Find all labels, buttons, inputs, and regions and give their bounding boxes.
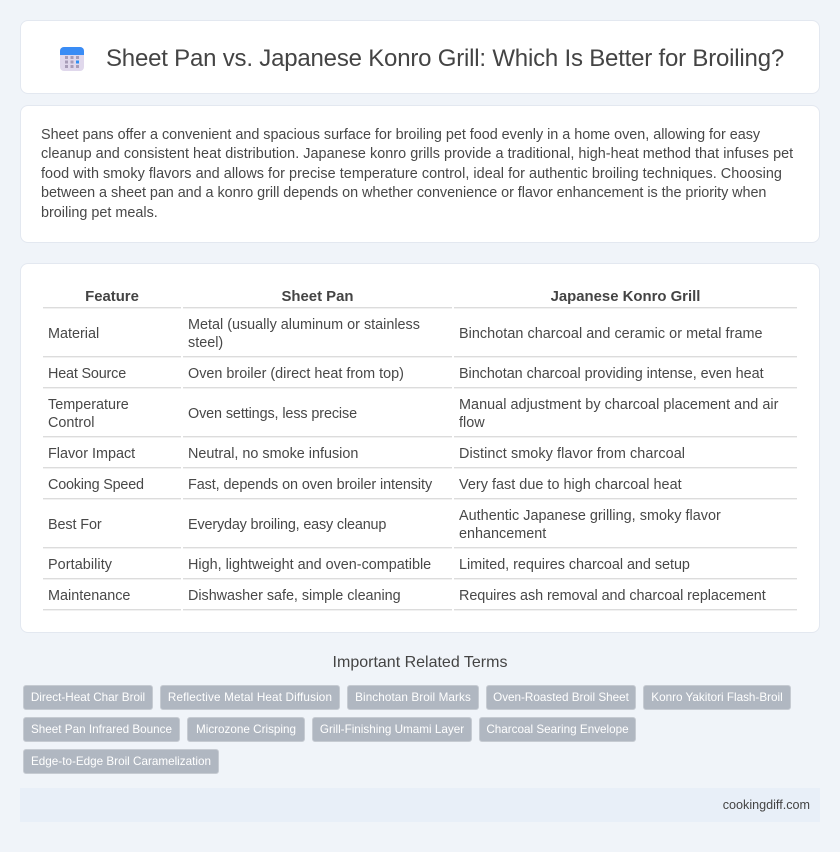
- tag list: related terms: Grill-Finishing Umami Layer: [320, 723, 464, 736]
- tag list: related terms: Microzone Crisping: [196, 723, 296, 736]
- tag list: related terms: Edge-to-Edge Broil Caramelization: [31, 755, 211, 768]
- text block: intro: cleanup and consistent heat distribution. Japanese konro grills provide a traditional, high-heat method that infuses pet: [41, 146, 793, 162]
- comparison table: Fast, depends on oven broiler intensity: [188, 477, 432, 493]
- tag list: related terms: Oven-Roasted Broil Sheet: [493, 691, 629, 704]
- comparison table: Flavor Impact: [48, 446, 135, 462]
- comparison table: Manual adjustment by charcoal placement and air: [459, 397, 778, 413]
- comparison table: Japanese Konro Grill: [551, 289, 700, 305]
- comparison table: enhancement: [459, 526, 546, 542]
- comparison table: Everyday broiling, easy cleanup: [188, 517, 386, 533]
- comparison table: Sheet Pan: [282, 289, 354, 305]
- comparison table: Cooking Speed: [48, 477, 144, 493]
- tag list: related terms: Reflective Metal Heat Diffusion: [168, 691, 332, 704]
- comparison table: Metal (usually aluminum or stainless: [188, 317, 420, 333]
- tag list: related terms: Binchotan Broil Marks: [355, 691, 471, 704]
- comparison table: Distinct smoky flavor from charcoal: [459, 446, 685, 462]
- comparison table: Maintenance: [48, 588, 130, 604]
- comparison table: Neutral, no smoke infusion: [188, 446, 358, 462]
- comparison table: Temperature: [48, 397, 129, 413]
- text block: intro: food with smoky flavors and allows for precise temperature control, ideal for authentic broiling techniques. Choosing: [41, 166, 782, 182]
- comparison table: Oven settings, less precise: [188, 406, 357, 422]
- comparison table: Control: [48, 415, 94, 431]
- text block: intro: [41, 127, 794, 221]
- comparison table: Authentic Japanese grilling, smoky flavor: [459, 508, 721, 524]
- comparison table: Requires ash removal and charcoal replacement: [459, 588, 766, 604]
- heading: related terms: Important Related Terms: [333, 654, 507, 671]
- comparison table: Material: [48, 326, 99, 342]
- comparison table: Dishwasher safe, simple cleaning: [188, 588, 401, 604]
- text block: intro: Sheet pans offer a convenient and spacious surface for broiling pet food evenly in a home oven, allowing for easy: [41, 127, 760, 143]
- icon: calendar: [60, 47, 84, 71]
- footer: source: cookingdiff.com: [723, 798, 810, 812]
- comparison table: Very fast due to high charcoal heat: [459, 477, 682, 493]
- footer: [20, 788, 820, 822]
- tag list: related terms: [23, 685, 791, 774]
- panel: comparison table: [20, 263, 820, 633]
- title: Sheet Pan vs. Japanese Konro Grill: Which Is Better for Broiling?: [106, 45, 784, 72]
- comparison table: Limited, requires charcoal and setup: [459, 557, 690, 573]
- comparison table: [43, 289, 797, 611]
- text block: intro: between a sheet pan and a konro grill depends on whether convenience or flavor enhancement is the priority when: [41, 185, 766, 201]
- tag list: related terms: Konro Yakitori Flash-Broil: [651, 691, 783, 704]
- comparison table: Oven broiler (direct heat from top): [188, 366, 404, 382]
- comparison table: Heat Source: [48, 366, 126, 382]
- tag list: related terms: Sheet Pan Infrared Bounce: [31, 723, 172, 736]
- comparison table: steel): [188, 335, 223, 351]
- comparison table: High, lightweight and oven-compatible: [188, 557, 431, 573]
- tag list: related terms: Charcoal Searing Envelope: [486, 723, 629, 736]
- text block: intro: broiling pet meals.: [41, 205, 158, 221]
- panel: intro: [20, 105, 820, 243]
- comparison table: Best For: [48, 517, 102, 533]
- comparison table: Portability: [48, 557, 112, 573]
- comparison table: flow: [459, 415, 485, 431]
- panel: title: [20, 20, 820, 94]
- tag list: related terms: Direct-Heat Char Broil: [31, 691, 145, 704]
- comparison table: Binchotan charcoal and ceramic or metal frame: [459, 326, 763, 342]
- comparison table: Feature: [85, 289, 139, 305]
- comparison table: Binchotan charcoal providing intense, even heat: [459, 366, 764, 382]
